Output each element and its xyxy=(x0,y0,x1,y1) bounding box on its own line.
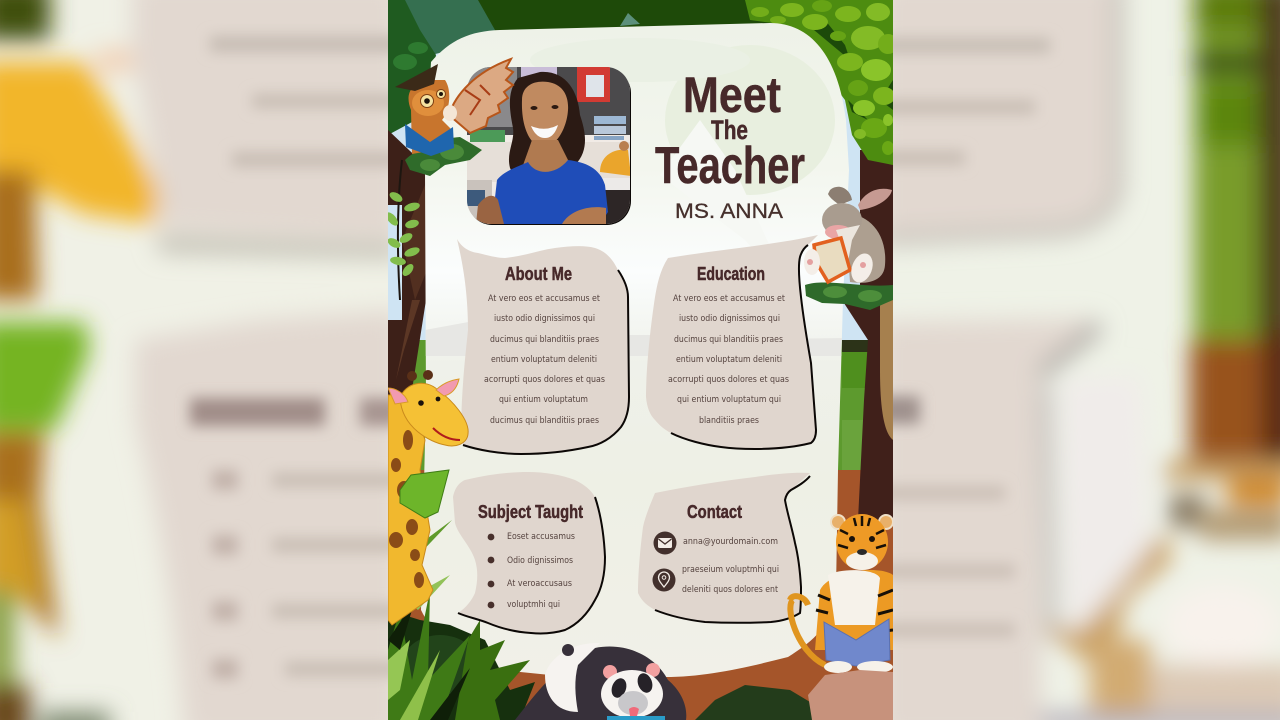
text: education body: At vero eos et accusamus et xyxy=(673,294,786,304)
grass: left bush xyxy=(388,520,535,720)
heading: contact: Contact xyxy=(687,502,742,522)
illustration: giraffe with book xyxy=(388,370,468,625)
text: education body: iusto odio dignissimos qui xyxy=(679,314,780,324)
text: about me body: entium voluptatum deleniti xyxy=(491,355,597,365)
text: education body: blanditiis praes xyxy=(699,416,759,426)
heading: subject taught: Subject Taught xyxy=(478,502,583,522)
heading: about me: About Me xyxy=(505,264,572,284)
text: about me body xyxy=(484,294,605,426)
text: address: deleniti quos dolores ent xyxy=(682,585,779,595)
text: about me body: ducimus qui blanditiis praes xyxy=(490,416,599,426)
title: meet the teacher: Meet xyxy=(683,67,781,123)
icon: location xyxy=(652,568,676,592)
content card xyxy=(421,23,849,677)
poster xyxy=(384,0,898,720)
panel: subject taught xyxy=(453,472,605,633)
blurred background: right side xyxy=(880,0,1280,720)
text: about me body: iusto odio dignissimos qui xyxy=(494,314,595,324)
text: about me body: At vero eos et accusamus et xyxy=(488,294,601,304)
title: meet the teacher: The xyxy=(711,115,748,145)
text: address: praeseium voluptmhi qui xyxy=(682,565,779,575)
scene: sky and forest background xyxy=(388,0,893,720)
text: about me body: qui entium voluptatum xyxy=(499,395,588,405)
text: about me body: ducimus qui blanditiis praes xyxy=(490,335,599,345)
text: education body: qui entium voluptatum qui xyxy=(677,395,781,405)
text: address xyxy=(682,565,779,595)
title: meet the teacher: Teacher xyxy=(655,137,805,195)
list: subjects: At veroaccusaus xyxy=(507,579,572,589)
title: meet the teacher xyxy=(655,77,805,184)
icon: email xyxy=(654,532,676,554)
tree: right canopy and trunk xyxy=(745,0,898,520)
list: subjects xyxy=(488,532,575,610)
text: about me body: acorrupti quos dolores et quas xyxy=(484,375,605,385)
illustration: owl with book xyxy=(395,59,513,176)
text: education body: acorrupti quos dolores et quas xyxy=(668,375,789,385)
panel: contact xyxy=(638,473,810,623)
illustration: panda with book xyxy=(515,643,686,720)
list: subjects: voluptmhi qui xyxy=(507,600,560,610)
rock under tiger xyxy=(808,670,893,720)
text: education body xyxy=(668,294,789,426)
panel: education xyxy=(646,235,818,449)
tree: left trunk and vines xyxy=(388,130,426,394)
photo: teacher in classroom xyxy=(467,67,631,225)
illustration: tiger with book xyxy=(790,514,893,673)
heading: education: Education xyxy=(697,264,765,284)
name: ms. anna: MS. ANNA xyxy=(675,200,783,223)
panel: about me xyxy=(457,239,629,454)
blurred background: left side xyxy=(0,0,402,720)
list: subjects: Eoset accusamus xyxy=(507,532,575,542)
text: education body: entium voluptatum deleniti xyxy=(676,355,782,365)
illustration: rabbit with book xyxy=(804,187,893,310)
list: subjects: Odio dignissimos xyxy=(507,556,573,566)
text: education body: ducimus qui blanditiis praes xyxy=(674,335,783,345)
right dark bush xyxy=(695,685,812,720)
text: email: anna@yourdomain.com xyxy=(683,537,778,547)
